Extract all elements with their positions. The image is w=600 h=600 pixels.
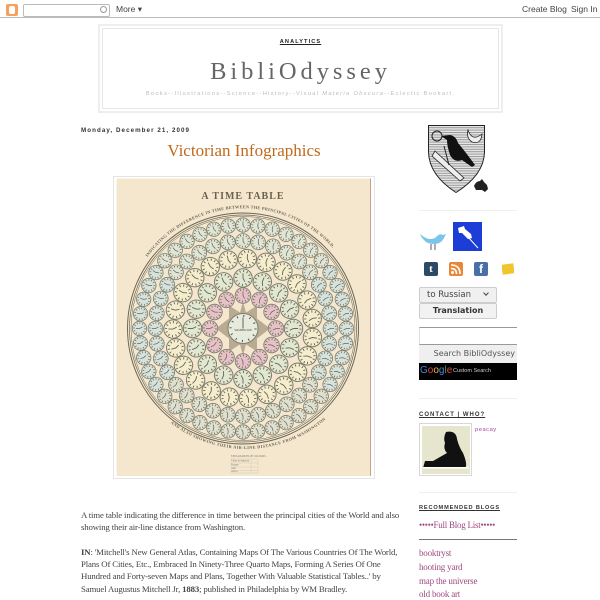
heading: a time table: A TIME TABLE xyxy=(201,191,285,202)
icon: blogger logo xyxy=(6,4,18,16)
blog link: old book art xyxy=(419,588,460,598)
colour legend: Cities in America xyxy=(231,460,250,462)
profile photo xyxy=(419,423,472,476)
google custom search bar: Custom Search xyxy=(453,368,491,374)
colour legend: Africa xyxy=(231,470,238,473)
analytics label: ANALYTICS xyxy=(280,39,321,45)
search button: Search BibliOdyssey xyxy=(434,349,515,358)
icon: twitter bird xyxy=(420,234,446,250)
clock dial xyxy=(128,213,358,444)
ring: yellow clocks xyxy=(164,249,323,408)
language select xyxy=(419,287,497,303)
icon: tumblr xyxy=(424,262,438,276)
tagline: Books--Illustrations--Science--History--Visual Materia Obscura--Eclectic Bookart. xyxy=(146,91,455,97)
contact heading: CONTACT | WHO? xyxy=(419,412,485,418)
ring: pink clocks xyxy=(202,288,284,369)
colour legend: Europe xyxy=(231,464,239,466)
create blog link: Create Blog xyxy=(522,4,567,14)
blog link: hooting yard xyxy=(419,562,462,572)
source paragraph: Samuel Augustus Mitchell Jr, 1883; published in Philadelphia by WM Bradley. xyxy=(81,584,347,594)
search button xyxy=(419,345,517,363)
icon: tumblr: t xyxy=(429,263,433,275)
source paragraph: IN: 'Mitchell's New General Atlas, Containing Maps Of The Various Countries Of The World, xyxy=(81,547,397,557)
top navigation bar xyxy=(0,0,600,18)
google custom search bar: Google xyxy=(420,365,452,376)
rule xyxy=(419,538,517,540)
center star xyxy=(216,302,270,356)
description paragraph xyxy=(81,510,399,532)
parchment xyxy=(116,178,371,476)
profile name: peacay xyxy=(475,427,497,433)
blog link: booktryst xyxy=(419,548,451,558)
icon: facebook: f xyxy=(479,262,483,276)
icon: pin on blue square xyxy=(453,222,482,251)
icon: mail xyxy=(502,263,514,275)
colour legend: EXPLANATION OF COLOURS. xyxy=(231,455,267,458)
more menu: More ▾ xyxy=(116,4,142,14)
colour legend xyxy=(230,455,267,473)
language select: to Russian xyxy=(427,290,471,300)
source paragraph: Plans Of Cities, Etc., Embraced In Ninety-Three Quarto Maps, Forming A Series Of One xyxy=(81,559,381,569)
search input xyxy=(419,327,517,345)
center clock: washington xyxy=(228,314,258,344)
full blog list link: •••••Full Blog List••••• xyxy=(419,520,495,530)
colour legend: Asia xyxy=(231,467,237,470)
icon: rss xyxy=(449,262,463,276)
blog link: map the universe xyxy=(419,576,477,586)
blog header panel xyxy=(98,24,503,113)
divider xyxy=(419,492,517,493)
ring: green clocks xyxy=(183,269,303,388)
description paragraph: showing their air-line distance from Washington. xyxy=(81,522,245,532)
ring: outer clocks xyxy=(132,218,354,439)
google custom search bar xyxy=(419,363,517,380)
source paragraph xyxy=(81,547,397,594)
australia xyxy=(474,179,488,192)
icon: facebook xyxy=(474,262,488,276)
recommended blogs heading: RECOMMENDED BLOGS xyxy=(419,505,500,511)
icon: shield crest xyxy=(428,125,488,194)
blog title: BibliOdyssey xyxy=(210,58,391,85)
search box xyxy=(23,4,110,17)
sign in link: Sign In xyxy=(571,4,597,14)
divider xyxy=(419,398,517,399)
divider xyxy=(419,210,517,211)
source paragraph: Hundred and Forty-seven Maps and Plans, Together With Valuable Statistical Tables..' by xyxy=(81,571,381,581)
ring: blue-grey clocks xyxy=(148,234,338,423)
translation button xyxy=(419,303,497,319)
arc caption top: INDICATING THE DIFFERENCE IN TIME BETWEEN THE PRINCIPAL CITIES OF THE WORLD. xyxy=(145,206,334,257)
description paragraph: A time table indicating the difference in time between the principal cities of the World and also xyxy=(81,510,399,520)
post title: Victorian Infographics xyxy=(167,141,321,160)
post date: Monday, December 21, 2009 xyxy=(81,127,190,134)
translation button: Translation xyxy=(433,306,483,315)
center clock: washington: WASHINGTON xyxy=(234,329,252,332)
infographic: time table image xyxy=(113,176,375,479)
bird xyxy=(441,135,475,167)
